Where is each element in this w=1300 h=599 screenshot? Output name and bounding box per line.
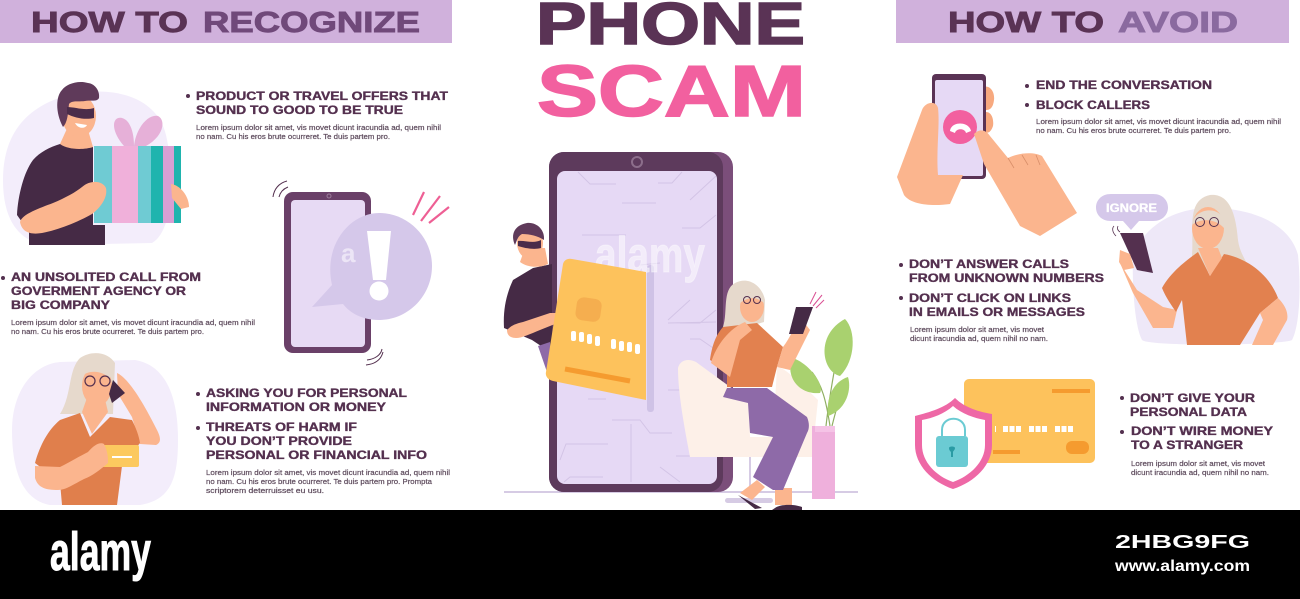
speech bubble: ignore [1096,194,1168,230]
text block: unknown numbers and links: DON’T ANSWER CALLS [909,259,1069,271]
text block: product or travel offers: Lorem ipsum dolor sit amet, vis movet dicunt iracundia ad, quem nihil [196,123,441,132]
potted plant [790,319,853,499]
illustration: masked man with gift [3,82,189,245]
text block: end the conversation: END THE CONVERSATION [1036,80,1212,92]
scammer [504,223,565,372]
illustration: woman on phone with card [12,353,178,505]
text block: product or travel offers: PRODUCT OR TRAVEL OFFERS THAT [196,91,448,103]
text block: product or travel offers [186,91,448,141]
text block: unsolicited call [1,272,255,336]
text block: unsolicited call: GOVERMENT AGENCY OR [11,286,187,298]
text block: end the conversation: BLOCK CALLERS [1036,100,1150,112]
text block: end the conversation: Lorem ipsum dolor sit amet, vis movet dicunt iracundia ad, quem nihil [1036,117,1281,126]
text block: personal information and threats: INFORMATION OR MONEY [206,402,386,414]
heading band: how to recognize: HOW TO [31,7,188,39]
image id and url [1114,532,1250,575]
heading band: how to avoid: AVOID [1118,7,1238,39]
text block: unknown numbers and links: IN EMAILS OR MESSAGES [909,307,1085,319]
heading band: how to recognize [0,0,452,43]
text block: unknown numbers and links [899,259,1104,343]
text block: personal data and money: DON’T WIRE MONEY [1131,426,1273,438]
alamy logo: alamy [50,522,151,582]
armchair [678,360,818,457]
image id and url: www.alamy.com [1114,558,1250,575]
illustration: phone with alert bubble [273,181,449,365]
illustration: hands ending call on phone [897,74,1077,236]
text block: end the conversation: no nam. Cu his eros brute ocurreret. Te duis partem pro. [1036,126,1231,135]
heading band: how to recognize: RECOGNIZE [203,7,420,39]
illustration: woman ignoring caller [1096,194,1300,345]
illustration: shield and credit card [915,379,1095,489]
text block: personal data and money: PERSONAL DATA [1130,407,1247,419]
text block: personal information and threats: no nam. Cu his eros brute ocurreret. Te duis partem pro. Prompta [206,477,433,486]
phone: alamy [595,227,705,283]
main title: SCAM [537,52,806,132]
text block: personal information and threats: PERSONAL OR FINANCIAL INFO [206,450,427,462]
text block: personal information and threats: ASKING YOU FOR PERSONAL [206,388,407,400]
text block: unknown numbers and links: dicunt iracundia ad, quem nihil no nam. [910,334,1048,343]
text block: personal information and threats: THREATS OF HARM IF [206,422,357,434]
text block: personal information and threats: YOU DON’T PROVIDE [206,436,352,448]
text block: unsolicited call: BIG COMPANY [11,300,110,312]
text block: product or travel offers: no nam. Cu his eros brute ocurreret. Te duis partem pro. [196,132,390,141]
phone [549,152,733,492]
main title [536,0,806,132]
text block: personal data and money [1120,393,1273,477]
text block: personal information and threats [196,388,450,495]
footer watermark bar [0,510,1300,599]
text block: unknown numbers and links: FROM UNKNOWN NUMBERS [909,273,1104,285]
heading band: how to avoid: HOW TO [948,7,1104,39]
image id and url: 2HBG9FG [1115,532,1250,552]
illustration: phone with alert bubble: a [341,238,356,268]
text block: unknown numbers and links: Lorem ipsum dolor sit amet, vis movet [910,325,1045,334]
text block: personal data and money: TO A STRANGER [1131,440,1244,452]
woman on armchair [710,281,824,510]
speech bubble: ignore: IGNORE [1106,201,1157,215]
text block: product or travel offers: SOUND TO GOOD TO BE TRUE [196,105,403,117]
ground line [504,491,858,493]
text block: personal data and money: Lorem ipsum dolor sit amet, vis movet [1131,459,1266,468]
illustration: giant phone with scammer and woman [504,152,858,510]
text block: unsolicited call: Lorem ipsum dolor sit amet, vis movet dicunt iracundia ad, quem nihil [11,318,255,327]
text block: unsolicited call: AN UNSOLITED CALL FROM [11,272,201,284]
text block: personal information and threats: scriptorem deterruisset eu usu. [206,486,324,495]
text block: personal data and money: DON’T GIVE YOUR [1130,393,1256,405]
text block: unknown numbers and links: DON’T CLICK ON LINKS [909,293,1071,305]
text block: personal data and money: dicunt iracundia ad, quem nihil no nam. [1131,468,1269,477]
text block: personal information and threats: Lorem ipsum dolor sit amet, vis movet dicunt iracundia ad, quem nihil [206,468,450,477]
text block: unsolicited call: no nam. Cu his eros brute ocurreret. Te duis partem pro. [11,327,204,336]
text block: end the conversation [1025,80,1281,135]
credit card [546,259,646,400]
heading band: how to avoid [896,0,1289,43]
